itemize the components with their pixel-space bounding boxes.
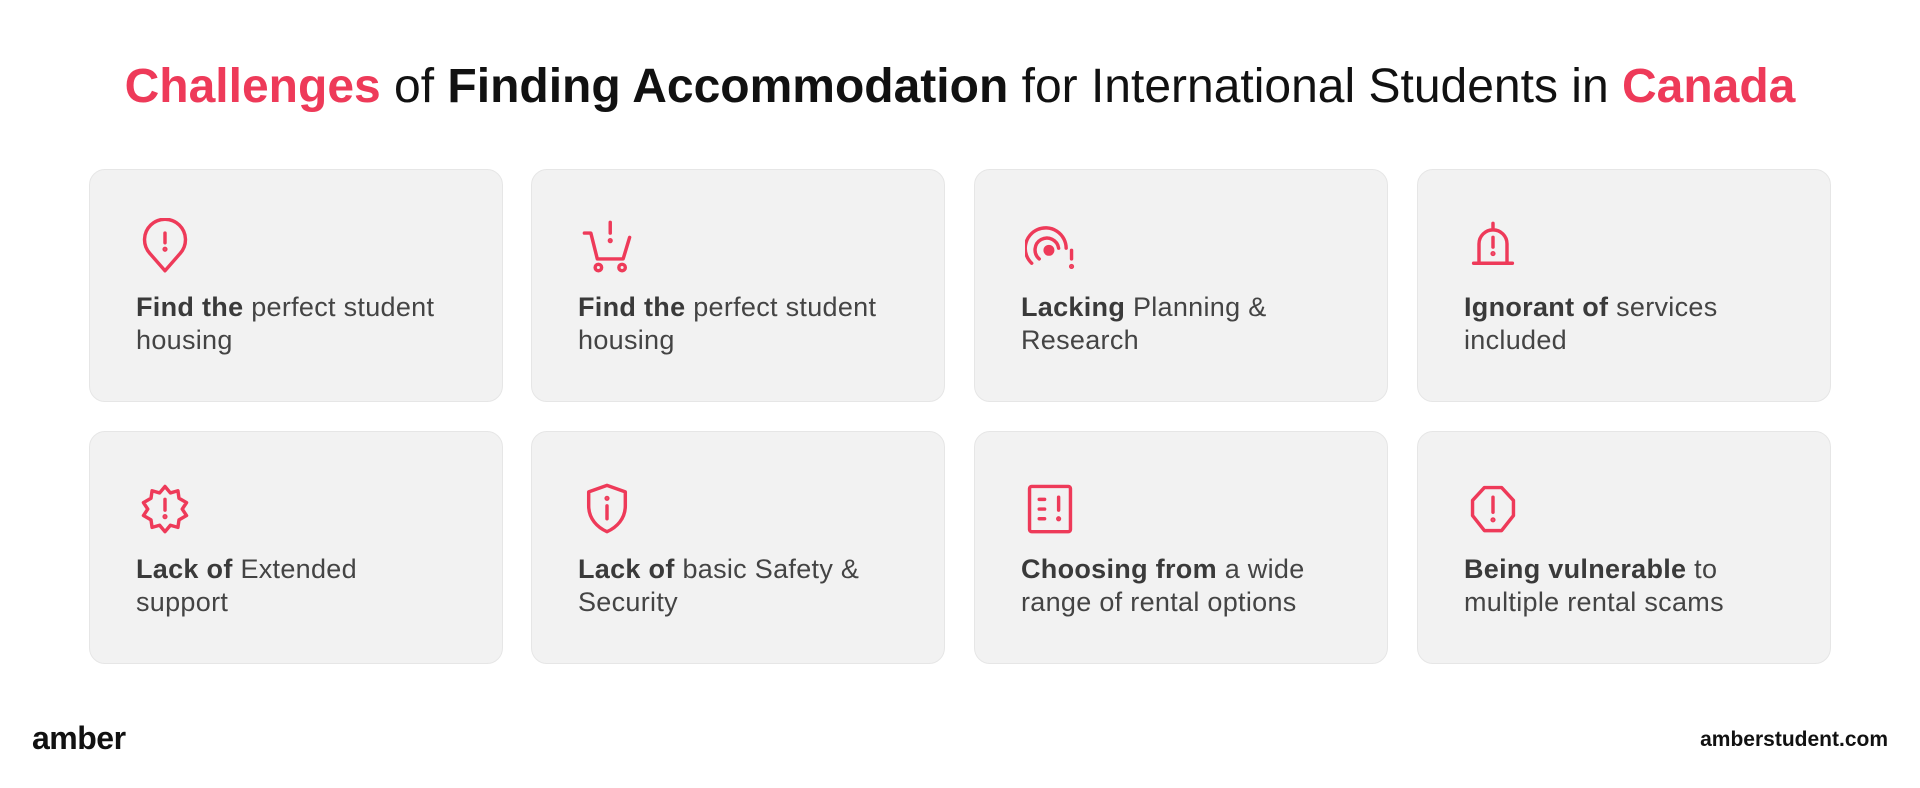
panel: safety — [531, 431, 945, 664]
text: Find the perfect student housing — [136, 292, 434, 355]
icon: shield — [586, 484, 628, 534]
icon: bell alert — [1472, 222, 1514, 265]
text: Lacking Planning & Research — [1021, 292, 1267, 355]
icon: list alert — [1028, 484, 1072, 534]
title: Challenges of Finding Accommodation for International Students in Canada — [125, 60, 1795, 113]
text: Choosing from a wide range of rental options — [1021, 554, 1305, 617]
text: Lack of basic Safety & Security — [578, 554, 859, 617]
icon: location alert — [142, 218, 188, 273]
logo: amber — [32, 720, 126, 756]
icon: octagon alert — [1470, 486, 1516, 532]
icon: signal alert — [1025, 226, 1074, 269]
panel: find housing 1 — [89, 169, 503, 402]
panel: scams — [1417, 431, 1831, 664]
icon: cart alert — [582, 220, 632, 272]
text: Lack of Extended support — [136, 554, 357, 617]
panel: services — [1417, 169, 1831, 402]
panel: support — [89, 431, 503, 664]
icon: gear alert — [142, 484, 188, 534]
text: Find the perfect student housing — [578, 292, 876, 355]
website url: amberstudent.com — [1700, 728, 1888, 751]
text: Ignorant of services included — [1464, 292, 1718, 355]
panel: find housing 2 — [531, 169, 945, 402]
text: Being vulnerable to multiple rental scams — [1464, 554, 1724, 617]
panel: planning — [974, 169, 1388, 402]
panel: rental options — [974, 431, 1388, 664]
